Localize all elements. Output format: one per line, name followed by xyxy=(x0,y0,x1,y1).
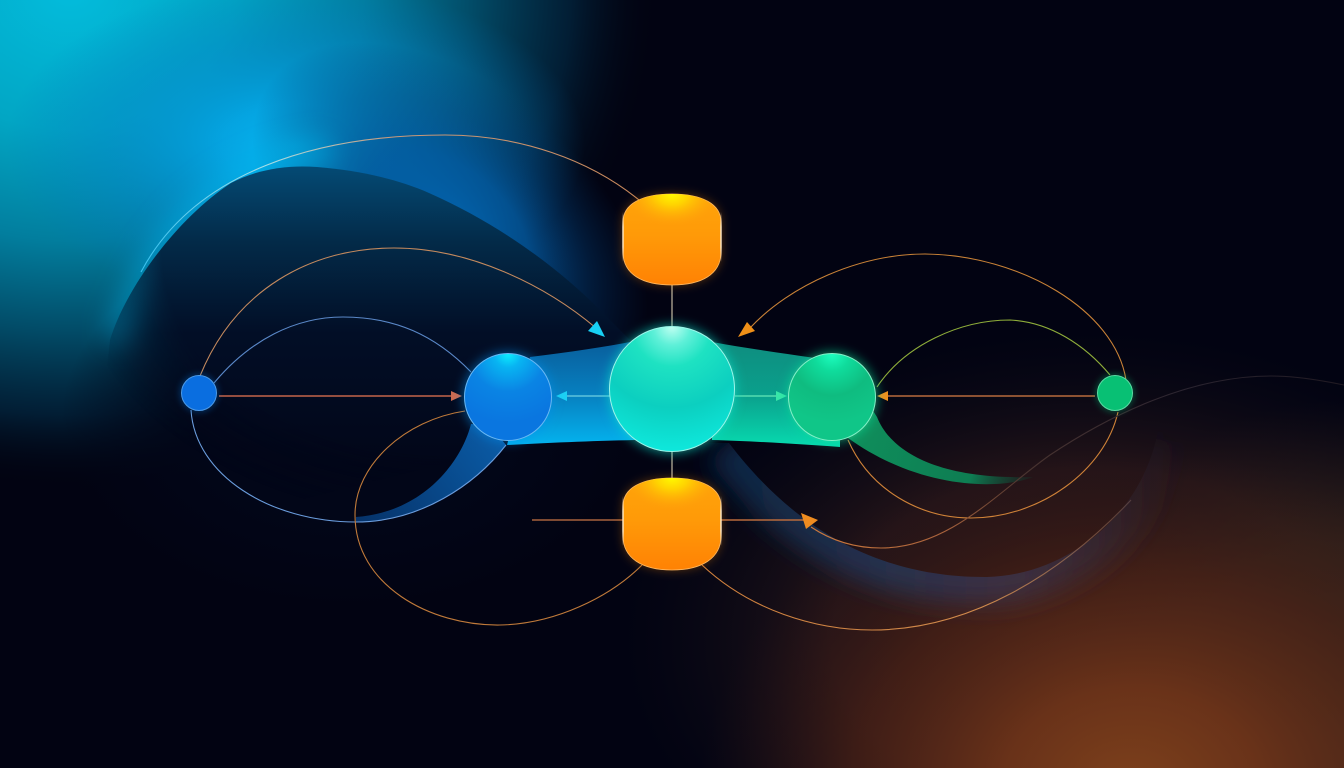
arrow: bottom right xyxy=(801,513,818,529)
curve: lower right long sweep xyxy=(702,500,1131,630)
curve: top arc into orange node xyxy=(141,135,639,272)
arrowheads xyxy=(451,321,888,529)
curve: lower left orange loop xyxy=(355,411,642,625)
connector curves xyxy=(141,135,1344,630)
center node xyxy=(607,324,737,454)
curve: return sweep into arrow xyxy=(811,376,1344,548)
arrow: into blue node xyxy=(451,391,462,401)
curve: lower left blue loop xyxy=(191,410,506,522)
green node xyxy=(786,351,878,443)
arrow: center to green xyxy=(776,391,787,401)
tail: green xyxy=(848,400,1033,484)
dark ribbon lower right xyxy=(729,440,1160,577)
central flow band xyxy=(356,341,1033,522)
tail: blue xyxy=(356,424,506,522)
line: left small to blue xyxy=(219,395,452,397)
small left node xyxy=(179,373,219,413)
arrow: center to blue xyxy=(556,391,567,401)
line: bottom node left xyxy=(532,519,624,521)
band: left xyxy=(507,341,635,445)
line: center to green xyxy=(735,395,778,397)
curve: upper right orange arc xyxy=(750,254,1126,380)
top orange node xyxy=(623,162,721,285)
line: right small to green xyxy=(888,395,1095,397)
curve: upper left orange arc xyxy=(200,248,596,376)
line: bottom node right xyxy=(720,519,804,521)
line: center to blue xyxy=(564,395,610,397)
arrow: into green node xyxy=(877,391,888,401)
curve: upper left blue arc xyxy=(214,317,471,383)
blue glow and dark swoosh xyxy=(97,135,630,392)
arrow: orange into center xyxy=(738,322,755,337)
line: center to top node xyxy=(671,284,673,328)
arrow: cyan into center xyxy=(588,321,605,337)
band: right xyxy=(712,342,840,447)
bottom orange node xyxy=(623,446,721,570)
line: center to bottom node xyxy=(671,450,673,480)
curve: upper right green arc xyxy=(877,320,1110,387)
blue node xyxy=(462,351,554,443)
small right node xyxy=(1095,373,1135,413)
curve: lower right orange loop xyxy=(848,412,1118,518)
